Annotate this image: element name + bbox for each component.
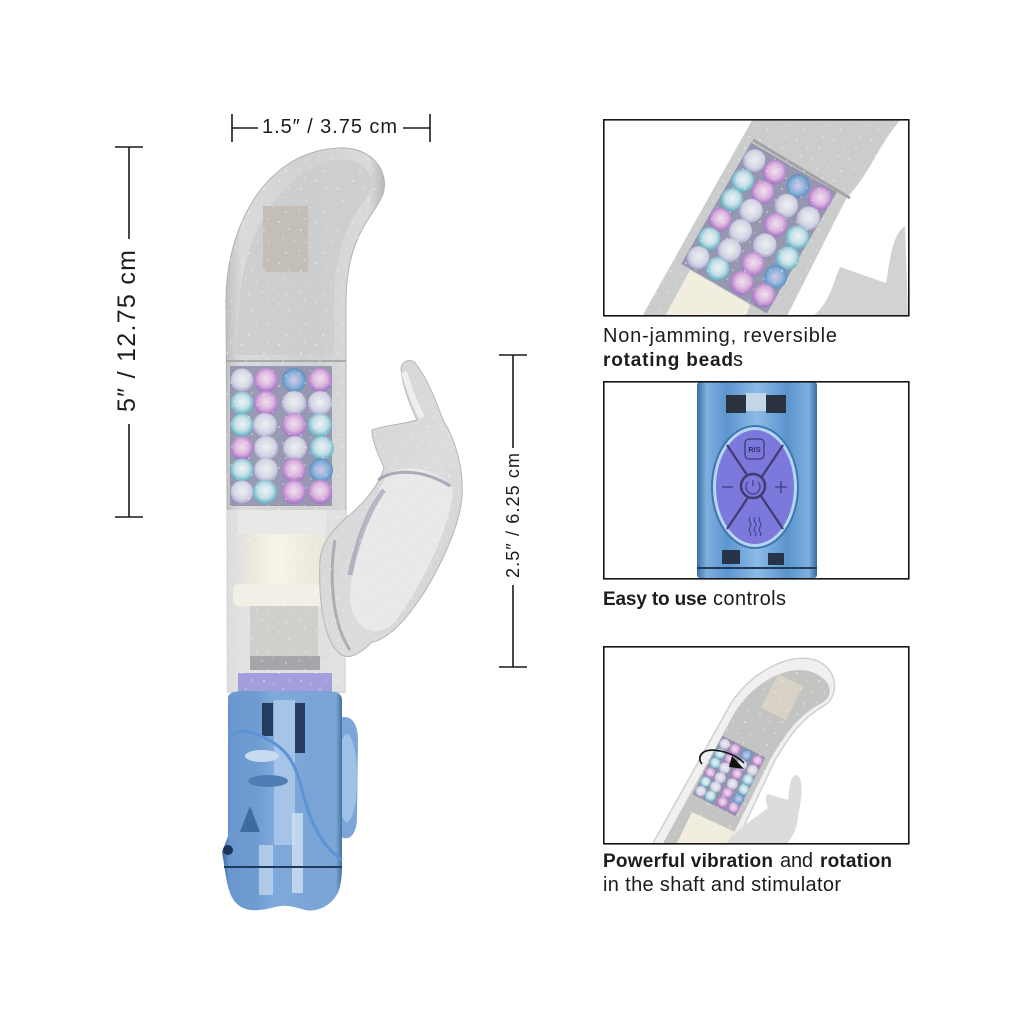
- caption: vibration and rotation: and: [780, 850, 813, 872]
- dimension: stimulator height: 2.5″ / 6.25 cm: [503, 453, 523, 578]
- stimulator ear close-up: [813, 226, 908, 316]
- caption: rotating beads: Non-jamming, reversible: [603, 325, 837, 347]
- blue chrome base: [222, 691, 358, 910]
- shaft with beads: [662, 670, 830, 845]
- caption: controls: [603, 588, 786, 610]
- caption: rotating beads: [603, 325, 837, 371]
- dimension: total height: [113, 147, 143, 517]
- control housing: [697, 382, 817, 578]
- caption: rotating beads: s: [733, 349, 743, 371]
- caption: controls: Easy to use: [603, 589, 707, 610]
- dimension: width: 1.5″ / 3.75 cm: [262, 116, 397, 138]
- cream rotator insert: [233, 510, 326, 670]
- purple band: [238, 673, 332, 693]
- dimension: stimulator height: [499, 355, 527, 667]
- rotating beads: [230, 366, 334, 506]
- control oval: [712, 426, 798, 548]
- panel: vibration and rotation: [604, 647, 909, 845]
- panel: controls: [604, 382, 909, 579]
- glitter overlay: [226, 148, 384, 692]
- shaft close-up: [640, 115, 905, 320]
- caption: vibration and rotation: Powerful vibration: [603, 851, 773, 872]
- main product illustration: [222, 148, 462, 910]
- rotation arrow: [700, 750, 744, 769]
- motion halo: [652, 658, 835, 845]
- stimulator: [725, 775, 802, 845]
- caption: vibration and rotation: [603, 850, 892, 896]
- dimension: total height: 5″ / 12.75 cm: [113, 250, 141, 412]
- caption: controls: controls: [713, 588, 786, 610]
- side stimulator: [320, 361, 462, 657]
- caption: vibration and rotation: in the shaft and stimulator: [603, 874, 841, 896]
- caption: rotating beads: rotating bead: [603, 350, 733, 371]
- caption: vibration and rotation: rotation: [820, 851, 892, 872]
- motor housing: [263, 206, 308, 272]
- dimension: width: [232, 114, 430, 142]
- control oval: R/S: [748, 445, 761, 454]
- panel: rotating beads: [604, 115, 909, 320]
- shaft body: [226, 148, 384, 692]
